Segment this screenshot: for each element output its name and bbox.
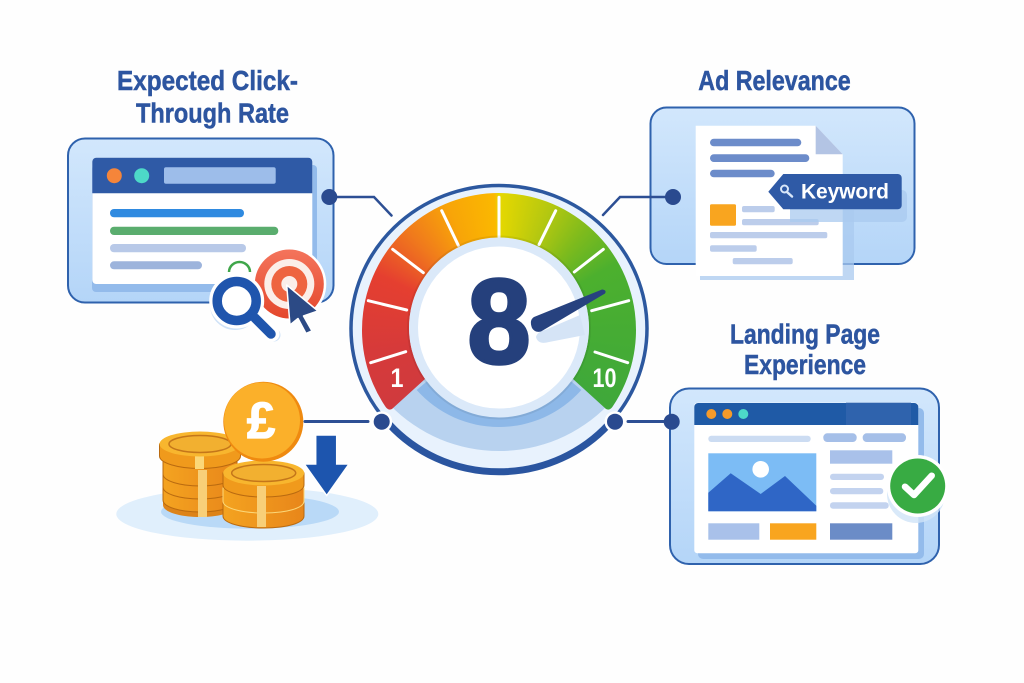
heading: expected click-through rate — [117, 65, 298, 129]
panel frame — [650, 108, 914, 264]
heading: landing page experience: Landing Page — [730, 318, 880, 349]
keyword tag — [768, 174, 907, 222]
panel frame — [670, 388, 939, 564]
image placeholder — [708, 453, 816, 511]
scale label: 1: 1 — [390, 363, 404, 393]
needle — [531, 290, 606, 343]
heading: expected click-through rate: Through Rate — [136, 98, 289, 129]
heading: expected click-through rate: Expected Click- — [117, 65, 298, 96]
icon: cursor — [287, 285, 318, 334]
icon: magnifying glass — [210, 276, 274, 335]
icon: pound coin: £ — [247, 392, 275, 449]
tick marks — [368, 197, 629, 363]
coin stack: left — [160, 432, 240, 517]
base shadow — [116, 487, 378, 541]
heading: landing page experience — [730, 318, 880, 380]
scale label: 10: 10 — [592, 363, 616, 393]
icon: target — [252, 247, 326, 321]
panel frame — [68, 138, 334, 302]
gauge end dots — [371, 411, 626, 432]
heading: landing page experience: Experience — [744, 349, 866, 380]
coin stack: right — [223, 460, 304, 528]
heading: ad relevance: Ad Relevance — [698, 65, 851, 96]
gauge colour band — [362, 193, 636, 410]
score: 8: 8 — [468, 255, 530, 389]
keyword tag: Keyword — [801, 180, 889, 204]
browser window — [92, 158, 317, 292]
icon: check badge — [887, 455, 949, 523]
icon: pound coin — [223, 382, 303, 462]
document — [696, 126, 854, 280]
icon: down arrow — [304, 435, 349, 496]
gauge — [349, 184, 649, 476]
browser window — [694, 403, 924, 559]
gauge dial — [407, 236, 591, 420]
